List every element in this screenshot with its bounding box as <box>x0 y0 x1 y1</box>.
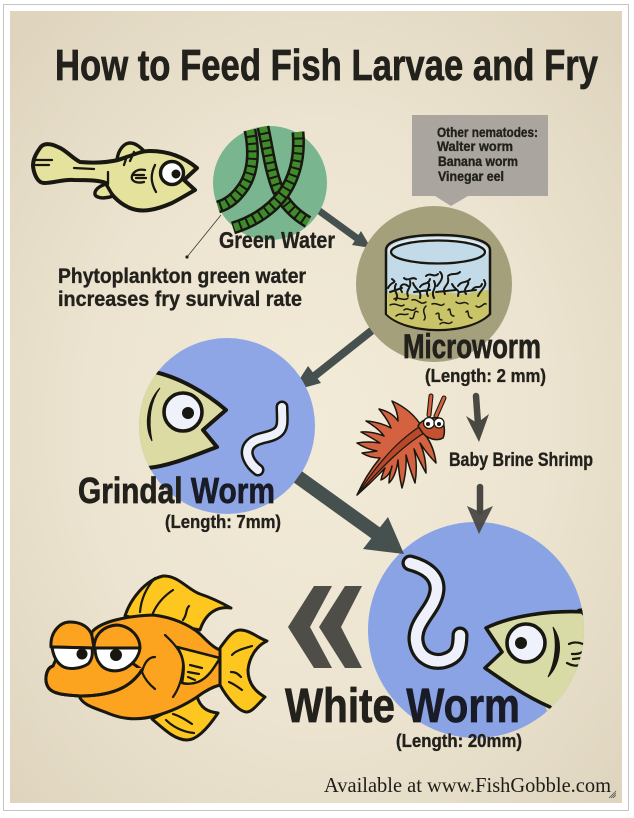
label: microworm: (Length: 2 mm) <box>425 366 546 386</box>
arrow: grindal worm to white worm <box>298 477 404 554</box>
note: phytoplankton: Phytoplankton green water <box>58 265 306 288</box>
icon: grindal worm <box>247 407 282 470</box>
callout: other nematodes <box>412 115 548 206</box>
label: microworm: Microworm <box>403 328 541 366</box>
arrow: green water to microworm <box>318 210 371 248</box>
callout: other nematodes: Vinegar eel <box>438 168 504 184</box>
callout: other nematodes: Other nematodes: <box>437 124 538 140</box>
circle: microworm <box>356 206 512 362</box>
label: grindal worm <box>78 470 281 532</box>
arrow: microworm to grindal worm <box>292 328 375 391</box>
leader line for green water note <box>185 215 221 259</box>
icon: baby brine shrimp <box>357 396 444 495</box>
label: white worm: (Length: 20mm) <box>396 731 522 751</box>
label: white worm: White Worm <box>285 680 520 733</box>
label: green water: Green Water <box>219 227 335 253</box>
arrow: microworm to baby brine shrimp <box>466 396 489 442</box>
footer: availability: Available at www.FishGobble.com <box>324 773 611 797</box>
note: phytoplankton: increases fry survival rate <box>58 288 302 311</box>
circle: white worm <box>368 522 585 738</box>
circle: green water <box>213 126 327 240</box>
label: baby brine shrimp: Baby Brine Shrimp <box>449 450 593 471</box>
arrow: chevrons from white worm to adult fish <box>288 586 362 668</box>
arrow: baby brine shrimp to white worm <box>467 487 493 534</box>
callout: other nematodes: Walter worm <box>437 138 513 154</box>
icon: fry head facing worm <box>485 608 585 720</box>
label: microworm <box>403 328 546 386</box>
icon: fish larva <box>33 143 197 210</box>
label: grindal worm: (Length: 7mm) <box>165 512 281 532</box>
icon: fry head <box>130 372 226 468</box>
label: grindal worm: Grindal Worm <box>78 470 275 511</box>
circle: grindal worm <box>130 338 315 514</box>
worm squiggles <box>388 272 485 300</box>
note: phytoplankton <box>58 265 306 311</box>
icon: adult gold fish <box>46 576 267 740</box>
icon: algae strands <box>218 127 308 228</box>
icon: white worm <box>410 563 460 661</box>
icon: culture jar <box>386 235 490 330</box>
callout: other nematodes: Banana worm <box>438 153 518 169</box>
